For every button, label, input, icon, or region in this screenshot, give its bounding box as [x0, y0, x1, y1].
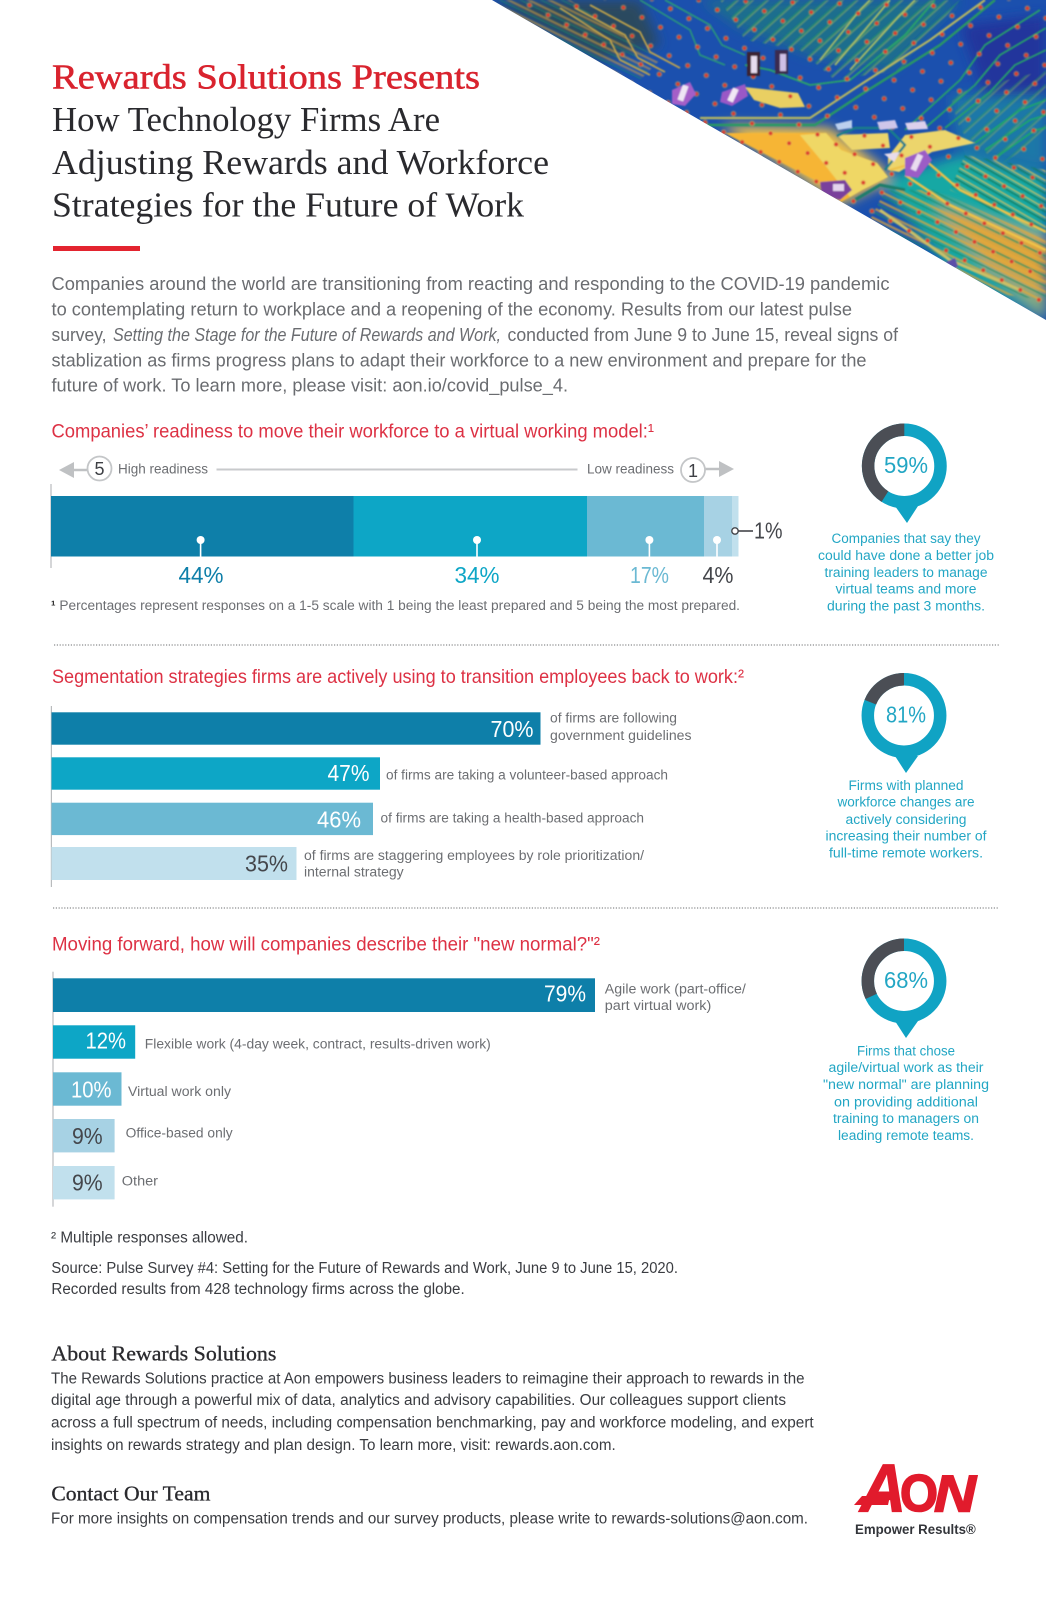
title line: Rewards Solutions Presents: Rewards Solutions Presents — [52, 58, 480, 96]
bar: 47%: 47% — [328, 760, 370, 786]
donut callout: 59%: 59% — [884, 452, 928, 478]
bar: 35%: 35% — [245, 851, 288, 877]
drilled dots — [526, 0, 1046, 304]
bar: 70%: government guidelines — [550, 728, 692, 743]
donut callout: 68%: agile/virtual work as their — [828, 1060, 984, 1075]
bar: 35%: of firms are staggering employees by role prioritization/ — [304, 848, 644, 863]
bar: 46%: of firms are taking a health-based approach — [380, 811, 644, 826]
donut callout: 59%: virtual teams and more — [836, 582, 976, 596]
bar: other 9%: Other — [122, 1174, 159, 1189]
stacked readiness bar: 17% — [630, 562, 669, 588]
bar values: 44% — [178, 562, 224, 588]
about section — [51, 1342, 814, 1454]
bar: other 9% — [53, 1166, 159, 1199]
title: Strategies for the Future of Work — [52, 186, 524, 224]
donut callout: 59%: training leaders to manage — [824, 565, 988, 580]
donut callout: 68%: Firms that chose — [857, 1044, 955, 1059]
donut callout: 59%: Companies that say they — [832, 531, 981, 546]
stacked readiness bar: 34% — [454, 562, 500, 588]
circuit board photo banner — [480, 0, 1046, 330]
segmentation bar chart — [51, 706, 692, 887]
title: How Technology Firms Are — [52, 100, 440, 139]
solder components — [672, 50, 958, 272]
bar: 10% — [53, 1072, 231, 1106]
donut callout: 81%: workforce changes are — [836, 795, 974, 810]
bar pins — [197, 536, 721, 556]
bar: 70% — [52, 711, 692, 745]
bar: 79% — [53, 978, 746, 1013]
title: Adjusting Rewards and Workforce — [52, 143, 549, 182]
donut callout: 81%: increasing their number of — [826, 829, 987, 844]
footnote 2: ² Multiple responses allowed. — [51, 1230, 248, 1247]
about section: The Rewards Solutions practice at Aon empowers business leaders to reimagine their approach to rewards in the — [51, 1370, 804, 1387]
donut callout: 81%: 81% — [886, 702, 926, 728]
donut callout: 59% — [818, 430, 994, 614]
donut callout: 68%: leading remote teams. — [838, 1128, 974, 1143]
bar: 70%: 70% — [490, 716, 534, 742]
bar: 79%: part virtual work) — [605, 998, 711, 1013]
red title rule — [53, 246, 140, 251]
about section: digital age through a powerful mix of data, analytics and advisory capabilities. Our colleagues support clients — [51, 1392, 786, 1409]
1% callout: 1% — [754, 518, 783, 544]
bar: 47%: of firms are taking a volunteer-based approach — [386, 767, 668, 782]
bar: 70%: of firms are following — [550, 711, 677, 726]
bar: 12%: 12% — [86, 1027, 126, 1053]
donut callout: 81% — [826, 679, 987, 860]
about section: insights on rewards strategy and plan design. To learn more, visit: rewards.aon.com. — [51, 1437, 616, 1454]
Aon logo: O — [900, 1465, 938, 1523]
readiness scale: Low readiness — [587, 462, 674, 476]
Aon logo — [854, 1450, 978, 1537]
bar: other 9%: 9% — [72, 1170, 103, 1196]
donut callout: 68%: on providing additional — [834, 1095, 978, 1110]
Aon logo: Empower Results® — [855, 1522, 976, 1537]
contact section: Contact Our Team — [51, 1482, 210, 1506]
donut callout: 81%: full-time remote workers. — [829, 845, 983, 860]
section 2 heading: Segmentation strategies firms are actively using to transition employees back to work:² — [52, 666, 744, 688]
source note: Source: Pulse Survey #4: Setting for the Future of Rewards and Work, June 9 to June 15, 2020. — [51, 1260, 678, 1277]
readiness scale: High readiness — [118, 462, 208, 476]
bar: 12% — [53, 1025, 491, 1059]
title — [52, 58, 549, 224]
donut callout: 81%: Firms with planned — [848, 778, 964, 793]
intro paragraph: Companies around the world are transitioning from reacting and responding to the COVID-19 pandemic — [52, 273, 890, 294]
intro paragraph: conducted from June 9 to June 15, reveal signs of — [508, 324, 899, 345]
intro paragraph: to contemplating return to workplace and a reopening of the economy. Results from our latest pulse — [52, 299, 852, 320]
stacked readiness bar: 4% — [702, 562, 734, 588]
bar: office 9%: 9% — [72, 1123, 103, 1149]
bar: 79%: Agile work (part-office/ — [605, 981, 746, 996]
intro paragraph: stablization as firms progress plans to adapt their workforce to a new environment and prepare for the — [52, 350, 866, 371]
about section: About Rewards Solutions — [51, 1342, 276, 1366]
yellow copper patches — [725, 132, 850, 202]
stacked readiness bar — [50, 484, 783, 588]
Aon logo: N — [934, 1466, 978, 1524]
bar: office 9% — [53, 1119, 233, 1152]
dotted divider — [53, 907, 998, 909]
donut callout: 68%: 68% — [884, 967, 928, 993]
1% callout — [732, 518, 783, 544]
about section: across a full spectrum of needs, including compensation benchmarking, pay and workforce modeling, and expert — [51, 1415, 814, 1432]
bar: 12%: Flexible work (4-day week, contract, results-driven work) — [145, 1036, 491, 1052]
contact section — [51, 1482, 808, 1527]
new normal bar chart — [52, 972, 746, 1207]
source note — [51, 1260, 678, 1298]
donut callout: 68% — [823, 945, 989, 1143]
readiness scale: 5 — [94, 459, 105, 479]
intro paragraph: Setting the Stage for the Future of Rewards and Work, — [113, 324, 501, 345]
bar: office 9%: Office-based only — [126, 1126, 233, 1141]
bar: 10%: Virtual work only — [128, 1084, 231, 1099]
bar: 46%: 46% — [317, 807, 361, 833]
donut callout: 81%: actively considering — [846, 812, 966, 827]
source note: Recorded results from 428 technology firms across the globe. — [51, 1281, 465, 1298]
bar: 47% — [52, 757, 668, 790]
section 1 heading: Companies’ readiness to move their workforce to a virtual working model:¹ — [52, 420, 654, 442]
bar: 35% — [52, 847, 644, 880]
donut callout: 68%: "new normal" are planning — [823, 1077, 989, 1092]
readiness scale — [59, 456, 734, 482]
intro paragraph: survey, — [52, 324, 106, 345]
traces — [560, 0, 1046, 290]
bar: 35%: internal strategy — [304, 865, 404, 880]
right arrow — [705, 461, 734, 477]
Aon logo: A — [858, 1450, 906, 1526]
bar: 79%: 79% — [544, 981, 586, 1007]
dotted divider — [54, 644, 1000, 646]
donut callout: 59%: during the past 3 months. — [827, 598, 985, 614]
contact section: For more insights on compensation trends and our survey products, please write to rewards-solutions@aon.com. — [51, 1510, 808, 1527]
bar: 10%: 10% — [71, 1076, 112, 1102]
left arrow — [59, 462, 88, 478]
intro paragraph — [52, 273, 899, 397]
intro paragraph: future of work. To learn more, please visit: aon.io/covid_pulse_4. — [52, 375, 568, 397]
section 3 heading: Moving forward, how will companies describe their "new normal?"² — [52, 934, 600, 956]
footnote 1: ¹ Percentages represent responses on a 1-5 scale with 1 being the least prepared and 5 being the most prepared. — [51, 598, 740, 613]
bar: 46% — [52, 803, 644, 835]
donut callout: 68%: training to managers on — [833, 1111, 979, 1126]
readiness scale: 1 — [688, 461, 698, 481]
donut callout: 59%: could have done a better job — [818, 548, 994, 563]
